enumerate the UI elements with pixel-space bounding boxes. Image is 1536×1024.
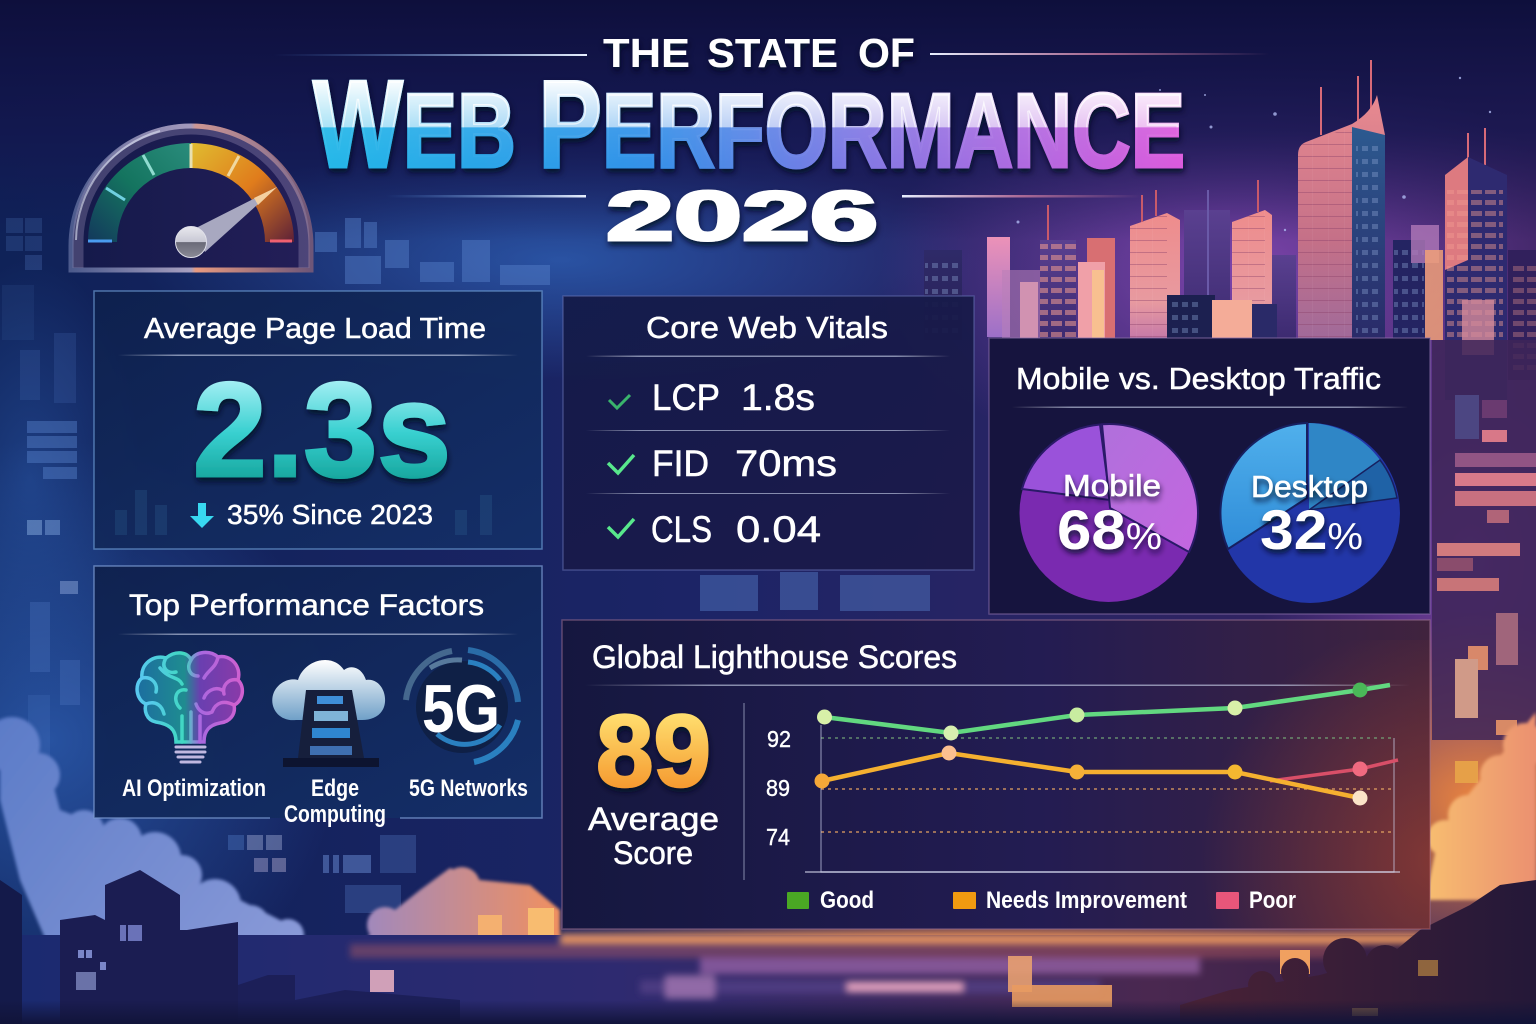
row: FID: FID <box>652 443 709 484</box>
panel: top performance factors <box>94 566 542 828</box>
panel: core web vitals <box>563 296 974 570</box>
value: 32% <box>1260 498 1363 561</box>
label: AI Optimization: AI Optimization <box>122 775 266 802</box>
title line: THE STATE OF: OF <box>858 30 915 76</box>
icon: down arrow <box>190 503 214 528</box>
legend: Needs Improvement <box>986 887 1187 914</box>
trend text: 35% Since 2023 <box>227 499 433 530</box>
row: CLS: 0.04 <box>736 509 821 550</box>
icon: 5G rings: 5G <box>422 671 500 747</box>
panel: global lighthouse scores <box>562 620 1430 929</box>
clouds <box>0 717 310 951</box>
heading: Average Page Load Time <box>144 313 486 345</box>
average score stat: 89 <box>596 694 711 808</box>
row: FID: 70ms <box>735 443 837 484</box>
icon: edge cloud tower <box>272 660 385 767</box>
skyline behind the panels <box>924 60 1536 400</box>
title: WEB PERFORMANCE: WEB PERFORMANCE <box>313 56 1185 194</box>
title line: THE STATE OF: THE <box>603 30 690 76</box>
label: Edge Computing: Computing <box>284 801 386 828</box>
label: Edge Computing: Edge <box>311 775 359 802</box>
floor bands and lit tiles <box>0 934 1536 1024</box>
right column blocks <box>1432 340 1536 783</box>
legend <box>787 887 1296 914</box>
axis labels: 89 <box>766 775 790 801</box>
heading: Mobile vs. Desktop Traffic <box>1016 361 1381 396</box>
pie: desktop 32% <box>1220 423 1400 603</box>
title line: THE STATE OF: STATE <box>707 30 838 76</box>
legend: Good <box>820 887 874 914</box>
label: Desktop <box>1251 469 1368 504</box>
heading: Core Web Vitals <box>646 310 888 345</box>
title: 2026: 2026 <box>606 177 878 255</box>
big stat: 2.3s: 2.3s <box>193 356 451 505</box>
pixel tiles on the left <box>2 218 930 913</box>
axis labels <box>766 726 791 850</box>
line chart <box>766 682 1400 872</box>
icon: brain bulb <box>137 652 242 762</box>
panel: mobile vs desktop traffic <box>989 338 1430 614</box>
title line: THE STATE OF <box>272 30 1270 76</box>
stars <box>1016 77 1491 231</box>
label: 5G Networks: 5G Networks <box>409 775 528 802</box>
foreground silhouettes <box>0 870 1536 1024</box>
axis labels: 92 <box>767 726 791 752</box>
lit windows by the pink cloud <box>478 908 554 940</box>
row: CLS: CLS <box>651 509 712 550</box>
title: WEB PERFORMANCE: WEB PERFORMANCE <box>313 56 1185 194</box>
average score stat: Score <box>613 835 693 871</box>
label: Edge Computing <box>284 775 386 828</box>
header: title block <box>272 30 1270 255</box>
series: poor <box>1270 760 1398 781</box>
average score stat <box>588 694 719 871</box>
axis labels: 74 <box>766 824 790 850</box>
row: CLS <box>608 509 821 550</box>
row: LCP: LCP <box>652 377 720 418</box>
series: good <box>817 682 1390 740</box>
heading: Global Lighthouse Scores <box>592 639 957 675</box>
row: LCP <box>609 377 815 418</box>
label: Mobile <box>1063 468 1161 503</box>
row: LCP: 1.8s <box>741 377 815 418</box>
gauge needle <box>176 187 277 258</box>
icon: 5G rings <box>406 650 518 762</box>
panel: average page load time <box>94 291 542 549</box>
pie: mobile 68% <box>1020 424 1198 602</box>
icon: speedometer gauge <box>71 126 311 270</box>
average score stat: Average <box>588 801 719 837</box>
value: 68% <box>1057 498 1162 561</box>
heading: Top Performance Factors <box>129 589 484 622</box>
row: FID <box>608 443 837 484</box>
legend: Poor <box>1249 887 1296 914</box>
series: needs improvement <box>814 746 1368 806</box>
